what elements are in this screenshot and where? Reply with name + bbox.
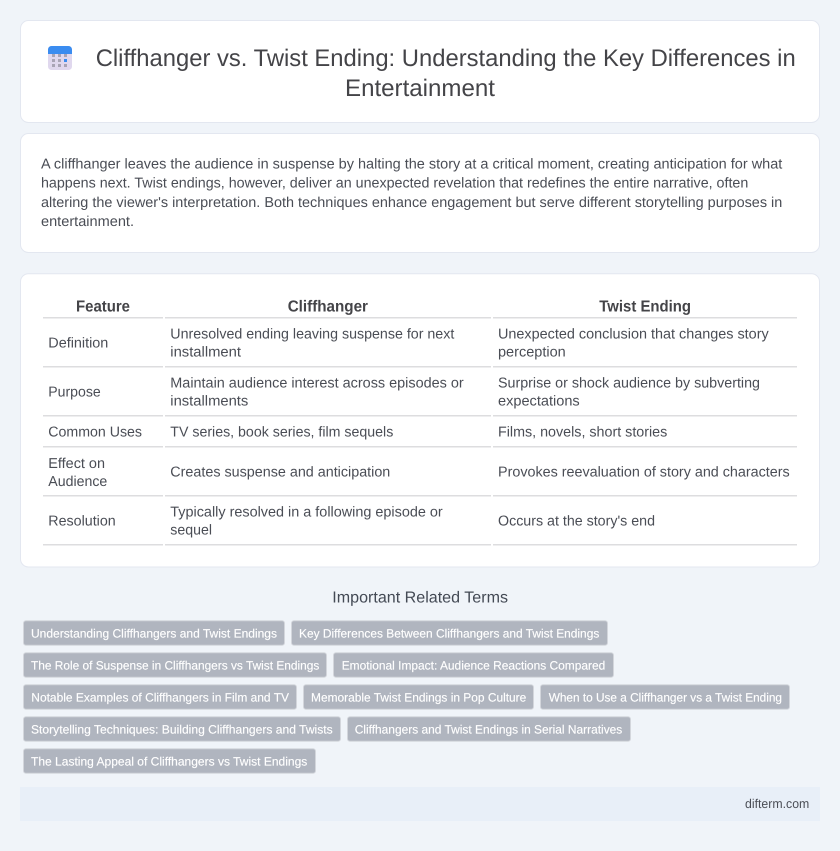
table row: definition: Unexpected conclusion that changes story xyxy=(498,327,770,343)
table row: definition: Definition xyxy=(48,336,108,352)
table row: effect on audience: Effect on xyxy=(48,456,105,472)
tag xyxy=(24,749,316,773)
tag: Understanding Cliffhangers and Twist Endings xyxy=(31,626,277,640)
table row: resolution: Typically resolved in a following episode or xyxy=(170,505,443,521)
table row: resolution: Resolution xyxy=(48,514,116,530)
title xyxy=(96,45,796,102)
table header row: Feature xyxy=(76,299,130,316)
tag: Notable Examples of Cliffhangers in Film and TV xyxy=(31,690,289,704)
tag xyxy=(348,717,630,741)
footer xyxy=(20,787,820,821)
text block: intro paragraph xyxy=(41,156,782,230)
table row: effect on audience: Creates suspense and anticipation xyxy=(170,465,390,481)
panel: comparison table xyxy=(20,274,820,567)
icon: calendar xyxy=(48,46,72,70)
tag xyxy=(24,717,340,741)
table row: purpose: installments xyxy=(170,394,248,410)
text block: intro paragraph: entertainment. xyxy=(41,214,134,230)
tag xyxy=(24,621,284,645)
table header row xyxy=(76,299,691,316)
panel: related term tags xyxy=(24,621,790,773)
table row: definition: installment xyxy=(170,345,241,361)
table row: definition xyxy=(48,327,770,361)
table row: common uses: TV series, book series, film sequels xyxy=(170,425,393,441)
table row: resolution: sequel xyxy=(170,523,212,539)
panel: title header xyxy=(20,20,820,122)
table row: purpose: Maintain audience interest across episodes or xyxy=(170,376,464,392)
table row: resolution xyxy=(48,505,655,539)
heading: important related terms: Important Related Terms xyxy=(332,590,508,607)
panel: introduction xyxy=(20,134,820,252)
footer: difterm.com xyxy=(745,796,809,811)
tag: Emotional Impact: Audience Reactions Compared xyxy=(342,658,605,672)
table row: effect on audience: Provokes reevaluation of story and characters xyxy=(498,465,790,481)
table row: common uses xyxy=(48,425,667,441)
table row: purpose: Purpose xyxy=(48,385,101,401)
tag: Storytelling Techniques: Building Cliffhangers and Twists xyxy=(31,722,333,736)
table row: common uses: Common Uses xyxy=(48,425,142,441)
table row: purpose: Surprise or shock audience by subverting xyxy=(498,376,760,392)
title: Entertainment xyxy=(345,75,495,102)
tag: Cliffhangers and Twist Endings in Serial Narratives xyxy=(355,722,622,736)
table row: purpose xyxy=(48,376,760,410)
tag xyxy=(334,653,614,677)
table row: effect on audience: Audience xyxy=(48,474,107,490)
title: Cliffhanger vs. Twist Ending: Understanding the Key Differences in xyxy=(96,45,796,72)
table row: definition: Unresolved ending leaving suspense for next xyxy=(170,327,454,343)
table row: purpose: expectations xyxy=(498,394,580,410)
table header row: Twist Ending xyxy=(599,299,691,316)
table row: resolution: Occurs at the story's end xyxy=(498,514,655,530)
tag: When to Use a Cliffhanger vs a Twist Ending xyxy=(549,690,782,704)
tag: Memorable Twist Endings in Pop Culture xyxy=(311,690,527,704)
tag: The Role of Suspense in Cliffhangers vs Twist Endings xyxy=(31,658,319,672)
tag: The Lasting Appeal of Cliffhangers vs Twist Endings xyxy=(31,754,307,768)
text block: intro paragraph: A cliffhanger leaves the audience in suspense by halting the story at a critical moment, creating anticipation for what xyxy=(41,156,782,172)
tag xyxy=(540,685,790,709)
table row: effect on audience xyxy=(48,456,790,490)
table row: common uses: Films, novels, short stories xyxy=(498,425,667,441)
tag xyxy=(24,685,296,709)
tag xyxy=(292,621,608,645)
text block: intro paragraph: happens next. Twist endings, however, deliver an unexpected revelation that redefines the entire narrative, often xyxy=(41,176,748,192)
tag xyxy=(24,653,326,677)
tag: Key Differences Between Cliffhangers and Twist Endings xyxy=(299,626,599,640)
table row: definition: perception xyxy=(498,345,566,361)
table header row: Cliffhanger xyxy=(288,299,368,316)
tag xyxy=(304,685,534,709)
text block: intro paragraph: altering the viewer's interpretation. Both techniques enhance engagement but serve different storytelling purposes in xyxy=(41,195,782,211)
